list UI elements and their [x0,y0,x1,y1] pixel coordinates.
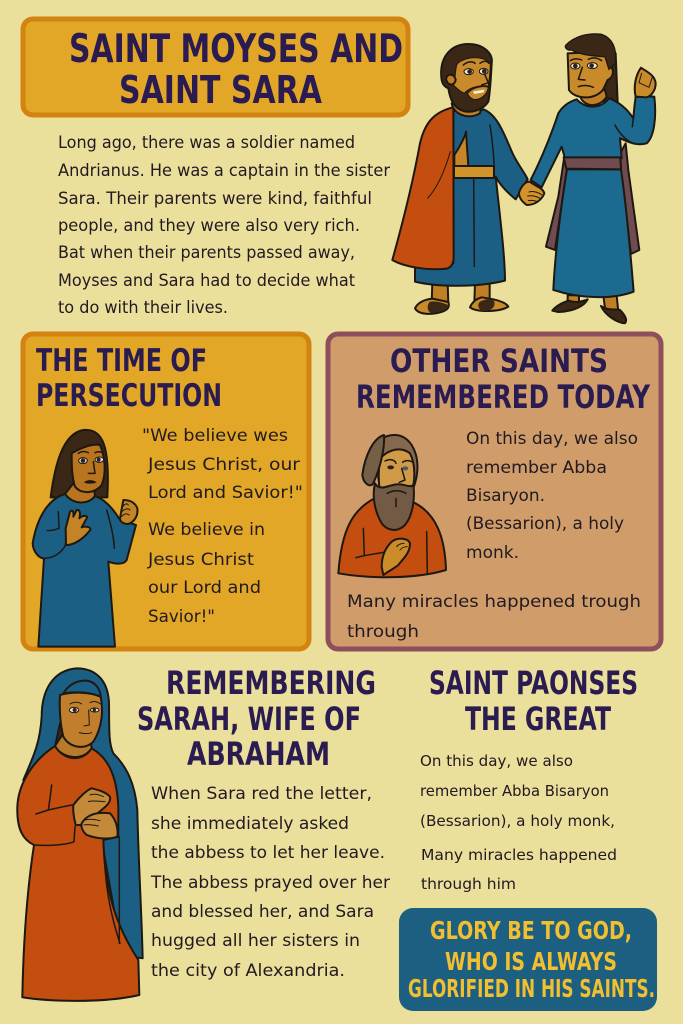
intro text block: Bat when their parents passed away, [58,243,355,263]
heading: other saints: OTHER SAINTS [390,342,608,380]
intro text block: Andrianus. He was a captain in the sister [58,161,390,181]
heading: other saints [356,342,651,416]
text: persecution quote: "We believe wes [142,426,288,446]
heading: remembering sarah: REMEMBERING [166,664,376,702]
heading: remembering sarah: SARAH, WIFE OF [137,700,361,738]
man's head [441,44,492,116]
intro text block: Long ago, there was a soldier named [58,133,355,153]
text: abba bisaryon: Bisaryon. [466,486,545,506]
woman's hair back [603,53,618,102]
section: remembering sarah [137,664,390,981]
heading: persecution: PERSECUTION [36,378,222,414]
icon: worried woman in blue [33,430,137,647]
heading: persecution: THE TIME OF [36,343,207,379]
text: miracles: Many miracles happened trough [347,592,641,612]
text: abba bisaryon: monk. [466,543,519,563]
heading: persecution [36,343,222,414]
heading: saint paonses: THE GREAT [465,700,611,738]
text: sara's letter: she immediately asked [151,814,349,834]
woman's raised fist [635,68,656,97]
text: abba bisaryon [466,429,638,563]
woman's robe [531,97,655,187]
text: persecution quote: Jesus Christ [147,550,254,570]
text: sara's letter: The abbess prayed over her [150,873,390,893]
man's legs and sandals [415,283,508,314]
heading: saint paonses [429,664,638,738]
man's robe [415,109,528,286]
text: saint paonses [420,752,617,893]
text: persecution quote: Lord and Savior!" [148,483,303,503]
text: persecution quote: our Lord and [148,578,261,598]
text: persecution quote: Savior!" [148,607,215,627]
text: abba bisaryon: (Bessarion), a holy [466,514,624,534]
text: abba bisaryon: remember Abba [466,458,607,478]
text: saint paonses: through him [421,875,516,893]
text: persecution quote: Jesus Christ, our [147,455,300,475]
text: abba bisaryon: On this day, we also [466,429,638,449]
intro text block [58,133,390,318]
woman's shoes [552,295,626,323]
text: sara's letter: and blessed her, and Sara [151,902,374,922]
icon: bearded monk [338,435,446,577]
text: miracles: through [347,622,419,642]
title: SAINT MOYSES AND [69,27,403,72]
man's tunic and belt [454,125,494,267]
callout: glory be to god: GLORY BE TO GOD, [430,916,632,945]
heading: remembering sarah [137,664,376,773]
panel: other saints remembered today [328,334,661,649]
panel: the time of persecution [23,334,309,649]
icon: Sarah in blue veil [17,668,143,1001]
intro text block: people, and they were also very rich. [58,216,360,236]
text: sara's letter: hugged all her sisters in [151,931,360,951]
icon: Moyses and Sara holding hands [392,34,656,323]
callout: glory be to god: WHO IS ALWAYS [445,947,617,976]
heading: remembering sarah: ABRAHAM [187,735,330,773]
text: sara's letter [150,784,390,981]
woman's purple sash [546,143,639,254]
intro text block: Moyses and Sara had to decide what [58,271,355,291]
clasped hands [519,182,544,205]
intro text block: to do with their lives. [58,298,228,318]
panel: title banner [23,19,408,115]
text: persecution quote: We believe in [148,520,265,540]
text: saint paonses: (Bessarion), a holy monk, [420,812,615,830]
title: SAINT SARA [119,68,322,112]
title [69,27,403,112]
text: saint paonses: Many miracles happened [421,846,617,864]
text: saint paonses: remember Abba Bisaryon [420,782,609,800]
woman's head [565,34,616,105]
text: sara's letter: the abbess to let her leave. [151,843,385,863]
man's red cloak [392,107,454,269]
intro text block: Sara. Their parents were kind, faithful [58,189,372,209]
text: sara's letter: When Sara red the letter, [151,784,372,804]
text: sara's letter: the city of Alexandria. [151,961,345,981]
callout: glory be to god [399,908,657,1011]
text: persecution quote [142,426,303,627]
text: saint paonses: On this day, we also [420,752,573,770]
section: saint paonses [420,664,638,893]
text: miracles [347,592,641,642]
